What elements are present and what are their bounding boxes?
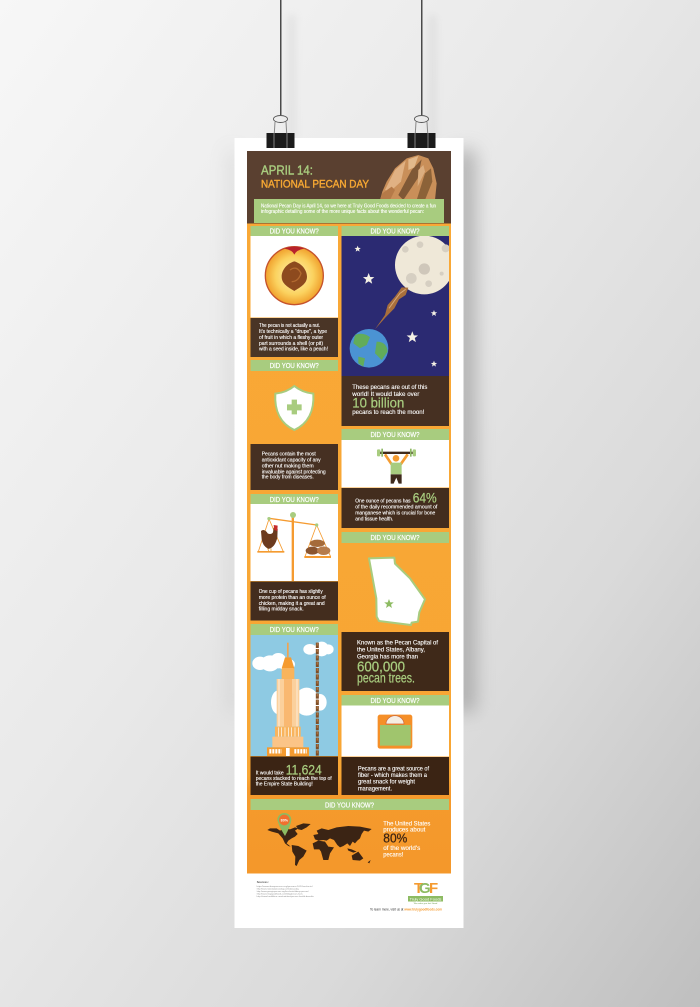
sources: http://www.healthline.com/nutrition/pecans-health-benefits xyxy=(257,895,315,898)
logo: Truly Good Foods: Truly Good Foods xyxy=(410,896,441,901)
sources: http://www.ilovepecans.org/pecans-101/fun-facts/ xyxy=(257,885,313,888)
text: protein fact: filling midday snack. xyxy=(259,607,304,613)
text: Empire State fact: 11,624 xyxy=(286,761,322,777)
panel: Empire State fact: DID YOU KNOW? xyxy=(270,627,319,634)
illustration: balance scale xyxy=(257,512,331,581)
intro box: infographic detailing some of the more unique facts about the wonderful pecan: xyxy=(261,209,424,215)
sources: http://www.georgiapecans.org/fun-facts/albany-pecans/ xyxy=(257,890,309,893)
sources xyxy=(257,880,315,898)
text: drupe fact xyxy=(258,323,328,352)
text: Georgia fact: the United States, Albany, xyxy=(357,648,425,654)
text: antioxidants fact: Pecans contain the most xyxy=(262,452,316,458)
panel: protein fact xyxy=(250,494,338,620)
text: antioxidants fact: antioxidant capacity of any xyxy=(262,458,321,464)
text: Georgia fact xyxy=(357,640,438,685)
text: manganese fact: and tissue health. xyxy=(355,516,393,522)
chart: world map xyxy=(267,813,372,866)
text: antioxidants fact xyxy=(262,452,326,481)
text: manganese fact: manganese which is crucial for bone xyxy=(355,511,435,517)
text: protein fact: chicken, making it a great and xyxy=(259,601,325,607)
illustration: moon, stars, earth xyxy=(350,236,454,368)
text: antioxidants fact: other nut making them xyxy=(262,463,314,469)
text: moon fact: world! It would take over xyxy=(351,392,419,398)
text: fiber fact: fiber - which makes them a xyxy=(358,773,428,779)
panel: moon fact xyxy=(342,226,454,426)
text: world production fact: 80% xyxy=(383,831,408,846)
logo: Truly Good Foods: G xyxy=(419,880,431,897)
panel: Georgia fact: DID YOU KNOW? xyxy=(370,535,420,542)
logo: Truly Good Foods: We make you feel Good xyxy=(414,903,438,905)
icon: Georgia map xyxy=(369,558,425,625)
text: protein fact: more protein than an ounce of xyxy=(259,595,326,601)
icon: bathroom scale xyxy=(378,715,412,749)
intro box xyxy=(254,199,444,223)
text: world production fact xyxy=(383,822,430,859)
text: world production fact: produces about xyxy=(383,828,426,834)
poster sheet xyxy=(234,138,464,928)
panel: fiber fact xyxy=(342,695,449,795)
text: fiber fact: management. xyxy=(358,786,392,792)
text: fiber fact: Pecans are a great source of xyxy=(358,766,429,772)
text: world production fact: The United States xyxy=(383,822,430,828)
text: moon fact: pecans to reach the moon! xyxy=(352,410,425,416)
panel: manganese fact xyxy=(342,429,449,528)
panel: drupe fact: DID YOU KNOW? xyxy=(270,228,319,236)
text: Georgia fact: Known as the Pecan Capital of xyxy=(357,640,438,646)
text: Empire State fact: It would take xyxy=(256,770,284,776)
text: antioxidants fact: invaluable against protecting xyxy=(262,469,326,475)
icon: drupe fruit cross-section xyxy=(265,247,323,305)
text: drupe fact: It's technically a "drupe", a type xyxy=(259,329,327,335)
binder clips xyxy=(266,133,436,148)
icon: map pin 80%: 80% xyxy=(281,818,289,822)
text: Georgia fact: Georgia has more than xyxy=(357,654,418,660)
text: Empire State fact xyxy=(256,761,332,788)
title: APRIL 14: xyxy=(261,163,313,178)
subtitle: NATIONAL PECAN DAY xyxy=(261,178,370,190)
illustration: skyscraper, clouds, pecan stack xyxy=(252,642,334,756)
text: manganese fact: One ounce of pecans has xyxy=(355,499,411,505)
panel: protein fact: DID YOU KNOW? xyxy=(270,497,319,504)
text: drupe fact: of fruit in which a fleshy outer xyxy=(259,335,323,341)
panel: world production fact: DID YOU KNOW? xyxy=(325,802,374,810)
text: protein fact xyxy=(259,589,326,613)
panel: drupe fact xyxy=(250,226,338,357)
text: Georgia fact: 600,000 xyxy=(357,659,405,676)
panel: Empire State fact xyxy=(250,624,338,795)
panel: antioxidants fact: DID YOU KNOW? xyxy=(270,363,319,370)
text: manganese fact: of the daily recommended amount of xyxy=(355,505,438,511)
text: Empire State fact: pecans stacked to reach the top of xyxy=(256,776,332,782)
logo: Truly Good Foods xyxy=(408,880,443,905)
text: moon fact xyxy=(351,385,427,416)
panel: world production fact xyxy=(250,799,449,866)
website line: To learn more, visit us at www.trulygoodfoods.com xyxy=(370,907,442,911)
icon: pecan xyxy=(380,155,437,200)
logo: Truly Good Foods: F xyxy=(429,880,438,897)
intro box: National Pecan Day is April 14, so we here at Truly Good Foods decided to create a fun xyxy=(261,204,436,210)
text: drupe fact: part surrounds a shell (or pit) xyxy=(259,341,323,347)
sources: Sources: xyxy=(257,880,269,884)
sources: http://www.nationalpecanday.com/about-day xyxy=(257,888,300,890)
panel: moon fact: DID YOU KNOW? xyxy=(370,228,420,236)
logo: Truly Good Foods: T xyxy=(414,880,423,897)
text: Empire State fact: the Empire State Building! xyxy=(256,782,313,788)
text: world production fact: of the world's xyxy=(383,846,420,852)
panel: header xyxy=(247,151,451,224)
text: antioxidants fact: the body from diseases. xyxy=(262,475,314,481)
text: world production fact: pecans! xyxy=(383,853,404,859)
text: protein fact: One cup of pecans has slightly xyxy=(259,589,323,595)
text: drupe fact: with a seed inside, like a peach! xyxy=(258,346,328,352)
hanging wires and clips xyxy=(274,0,436,140)
icon: weightlifter xyxy=(377,449,416,484)
panel: antioxidants fact xyxy=(250,360,338,490)
text: manganese fact xyxy=(355,490,438,522)
text: manganese fact: 64% xyxy=(413,490,437,506)
text: moon fact: These pecans are out of this xyxy=(352,385,427,391)
panel: manganese fact: DID YOU KNOW? xyxy=(370,432,420,439)
orange content panel xyxy=(247,224,451,874)
text: fiber fact: great snack for weight xyxy=(358,780,415,786)
text: moon fact: 10 billion xyxy=(352,394,404,410)
text: Georgia fact: pecan trees. xyxy=(357,669,415,685)
text: fiber fact xyxy=(358,766,429,792)
panel: fiber fact: DID YOU KNOW? xyxy=(370,698,420,705)
icon: shield xyxy=(275,386,313,430)
sources: http://www.trulygoodfoods.com/blog/pecan-facts xyxy=(257,892,304,896)
panel: Georgia fact xyxy=(342,532,449,691)
text: drupe fact: The pecan is not actually a nut. xyxy=(259,323,320,329)
